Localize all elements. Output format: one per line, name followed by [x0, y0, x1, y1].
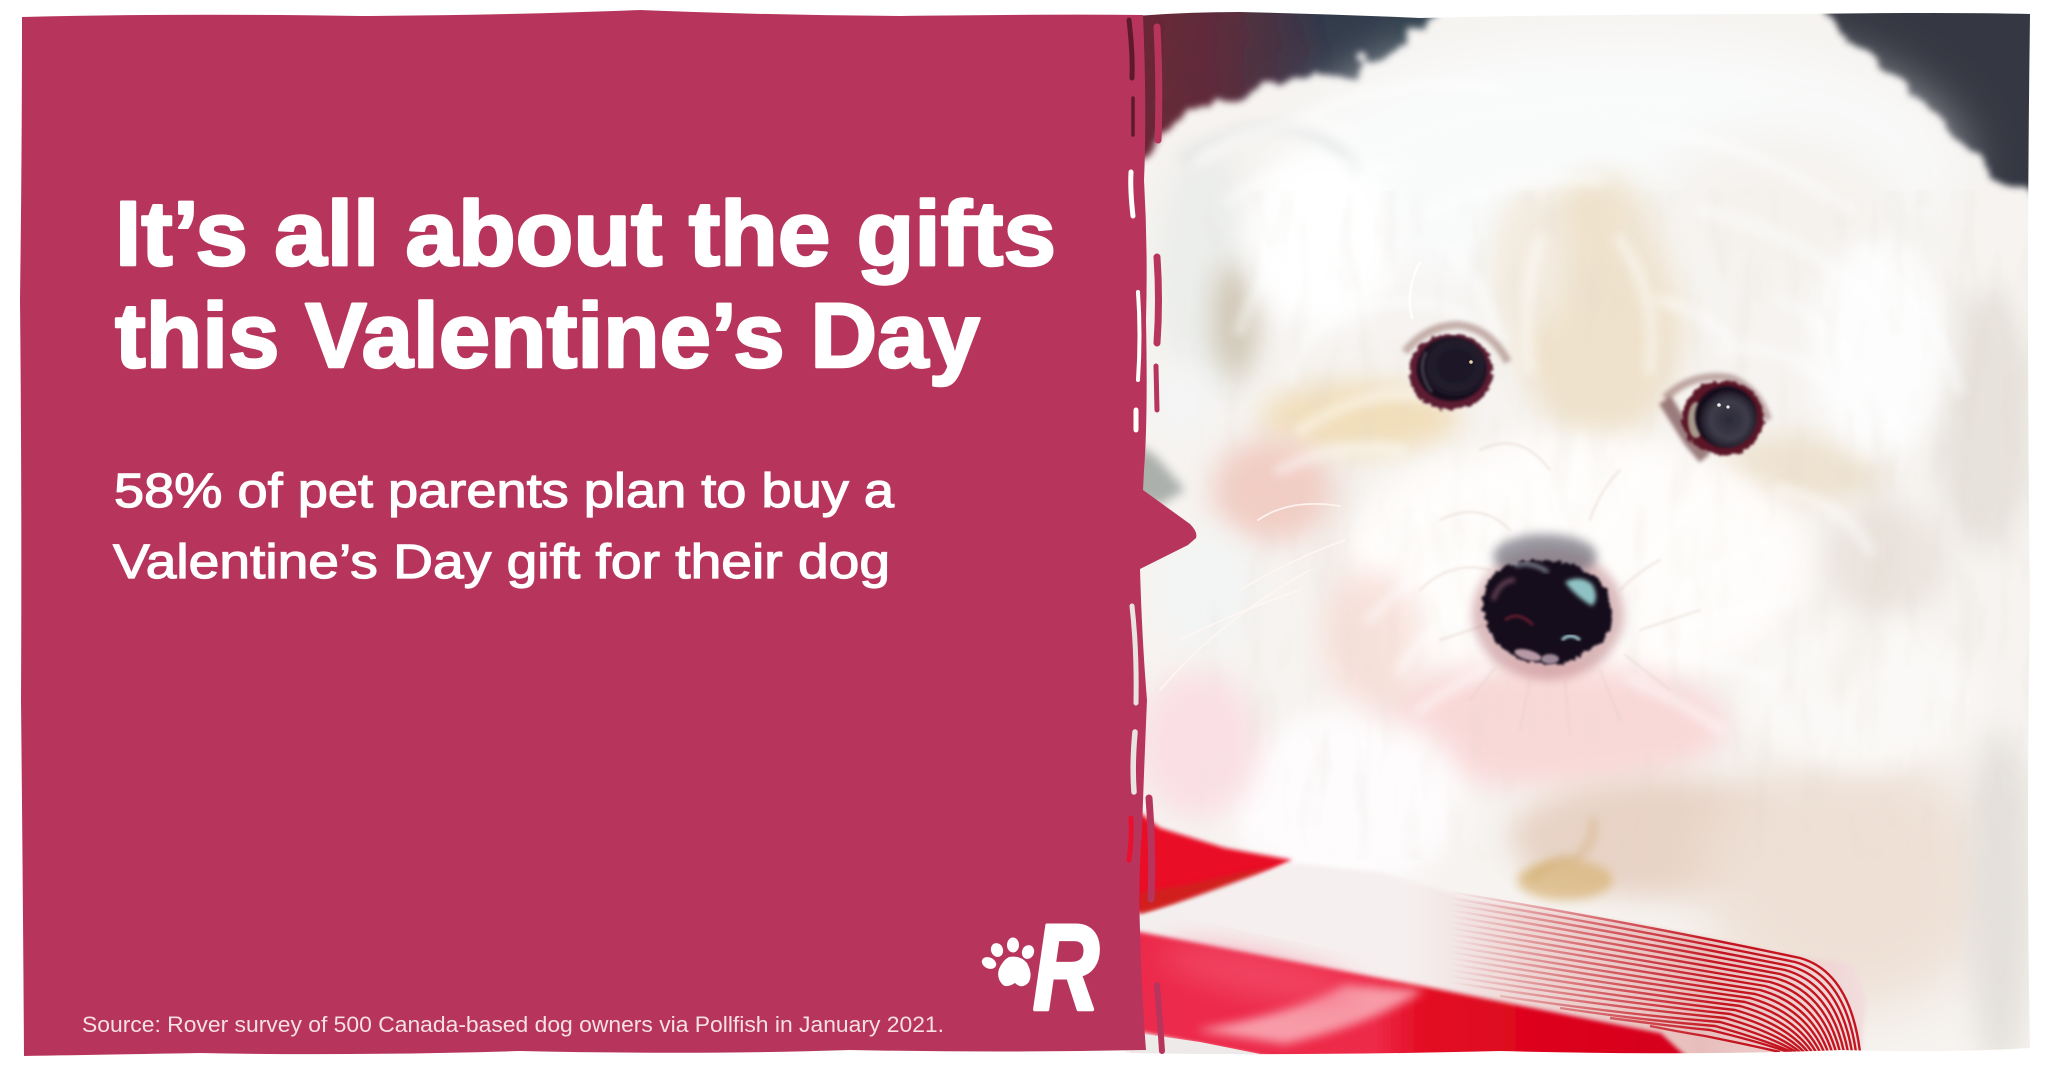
- nose: [1472, 534, 1624, 680]
- dashed stitches along panel edge: [1129, 20, 1162, 1051]
- subheading: Valentine’s Day gift for their dog: [113, 536, 890, 589]
- photo: white puppy with gift box: [1120, 0, 2048, 1068]
- heading: It’s all about the gifts: [115, 183, 1056, 285]
- gift box: red bow flap: [1130, 805, 1292, 915]
- gift box: ribbon highlight left: [1158, 935, 1362, 1015]
- fur texture overlay: [1322, 756, 1326, 770]
- subheading: [113, 465, 894, 589]
- gift box: flap underside: [1140, 866, 1272, 915]
- fur strands: [1159, 176, 1964, 732]
- logo: Rover paw and R: [980, 899, 1099, 1035]
- gift box: bottom white strip: [1130, 1034, 1260, 1054]
- gift box: lid stripes: [1450, 892, 1860, 1052]
- gift box: ribbon sheen: [1195, 985, 1425, 1044]
- photo background: dark wall top left: [1143, 12, 1441, 164]
- gift box: collar tag: [1517, 818, 1613, 900]
- heading: [115, 183, 1056, 387]
- left eye: [1405, 325, 1508, 410]
- gift box: red ribbon: [1130, 930, 1690, 1060]
- photo background: dark wall top right: [1820, 13, 2030, 197]
- photo background: grey gap beside ear: [1143, 443, 1188, 508]
- icon: paw print: [980, 938, 1036, 986]
- right eye: [1665, 377, 1768, 458]
- whiskers: [1160, 504, 1345, 690]
- panel: crimson text panel with torn edge: [20, 10, 1196, 1056]
- fur shading: [1136, 40, 2035, 1068]
- heading: this Valentine’s Day: [115, 285, 980, 387]
- gift box: striped lid: [1130, 863, 1866, 1060]
- logo: Rover paw and R: R: [1033, 899, 1099, 1035]
- source note: Source: Rover survey of 500 Canada-based dog owners via Pollfish in January 2021.: [82, 1012, 944, 1037]
- subheading: 58% of pet parents plan to buy a: [114, 465, 894, 518]
